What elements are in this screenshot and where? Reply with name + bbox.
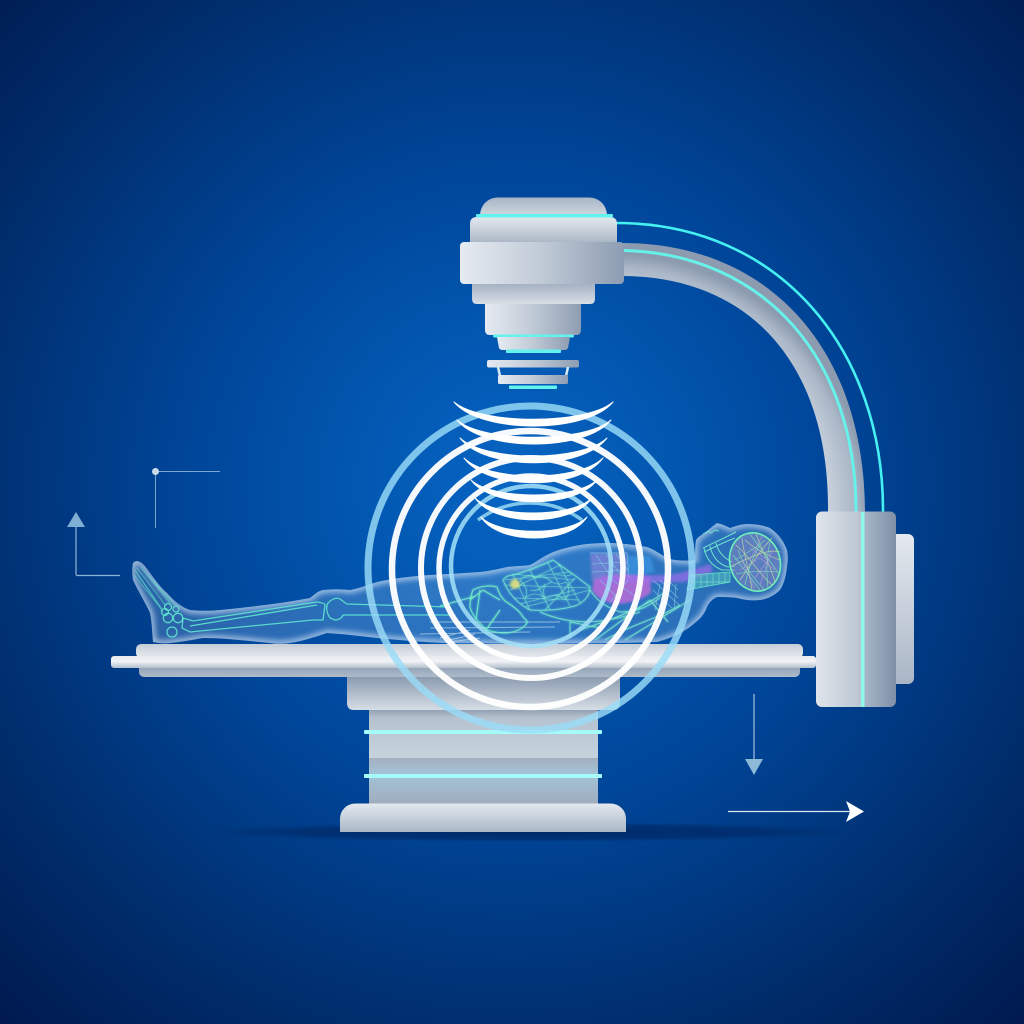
lung region blue (627, 556, 655, 578)
cyan strip mid (493, 334, 574, 338)
arrow: down (745, 694, 763, 775)
upper housing (470, 217, 617, 243)
body edge glow (132, 523, 788, 644)
body silhouette (132, 523, 788, 644)
cyan strip upper (364, 730, 602, 734)
table rail (111, 656, 816, 668)
dome cap (480, 198, 607, 216)
pedestal head (347, 677, 620, 710)
white ring medium (421, 458, 641, 678)
table pedestal (340, 677, 626, 832)
foot bones (134, 567, 183, 637)
lung network (590, 553, 680, 612)
back panel (880, 534, 914, 684)
arm body (622, 243, 865, 513)
light ring inner (451, 486, 611, 646)
lens (497, 337, 570, 350)
cyan strip lens (506, 350, 561, 353)
arm cyan outer line (616, 223, 883, 513)
jaw and teeth lines (703, 530, 736, 570)
organ: pink (592, 575, 651, 604)
filter struts (498, 367, 568, 376)
white ring small (439, 476, 623, 660)
upper leg bones (327, 598, 450, 620)
table underside (139, 662, 800, 677)
wave crescents (454, 402, 613, 538)
cyan strip top (476, 214, 613, 218)
pedestal column upper (369, 708, 598, 758)
floor shadow (205, 822, 855, 842)
thigh and hand lines (420, 622, 560, 642)
collimator (485, 304, 581, 335)
lung region lilac (590, 553, 629, 582)
abdomen network (503, 560, 690, 640)
white ring large (392, 431, 668, 707)
light arc inner (478, 503, 582, 520)
main column (816, 512, 896, 707)
wave rings (368, 406, 692, 730)
patient body (132, 523, 788, 644)
scanner head (460, 198, 624, 389)
pedestal base (340, 804, 626, 832)
cyan strip (861, 512, 864, 707)
patient table (111, 644, 816, 677)
arrow: up and right axis (67, 512, 120, 576)
filter disc (487, 360, 579, 368)
filter base (498, 375, 568, 384)
brain (722, 526, 788, 598)
light ring outer (368, 406, 692, 730)
coordinate marker: dot with lines (152, 468, 220, 528)
pedestal column lower (369, 758, 598, 805)
arm cyan inner line (624, 250, 856, 513)
spine purple band (600, 564, 712, 583)
cyan strip bottom (509, 386, 557, 389)
pelvis (440, 586, 527, 633)
spine vertebrae (687, 572, 730, 590)
yellow hot spot (510, 579, 520, 589)
lower housing (472, 284, 595, 304)
cyan strip lower (364, 774, 602, 778)
table top (136, 644, 803, 658)
lower leg bones (182, 602, 325, 632)
wide band (460, 242, 624, 284)
scanner column (816, 512, 914, 707)
arrow: right (728, 801, 864, 822)
scanner C-arm (616, 223, 883, 513)
